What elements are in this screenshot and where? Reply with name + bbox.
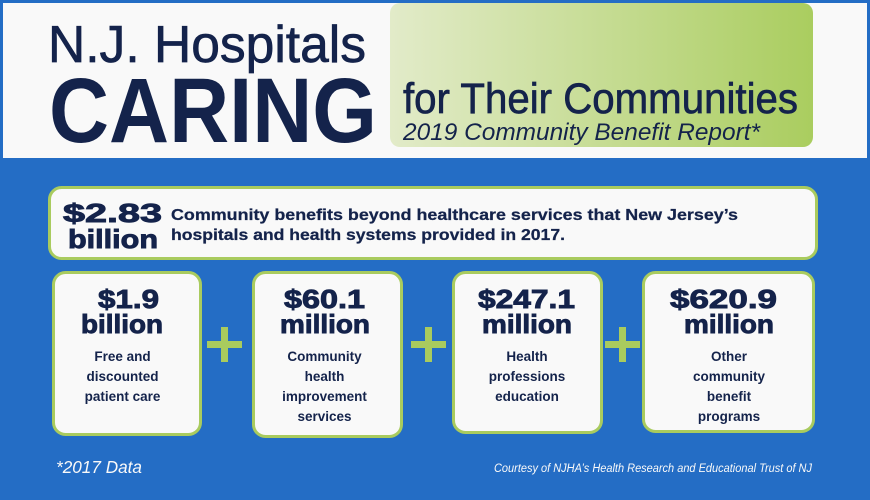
- icon: plus 1: [207, 327, 242, 362]
- total unit: billion: [68, 224, 158, 254]
- card: health professions education: Health: [506, 349, 548, 364]
- total description line 2: hospitals and health systems provided in 2017.: [171, 227, 565, 244]
- card: free and discounted care: billion: [81, 309, 163, 339]
- card: free and discounted care: discounted: [86, 369, 159, 384]
- card: community health improvement: million: [280, 309, 370, 339]
- card: community health improvement: health: [305, 369, 344, 384]
- title: CARING: CARING: [49, 60, 377, 162]
- card: other community benefit programs: $620.9: [670, 284, 777, 314]
- card: other community benefit programs: programs: [698, 409, 760, 424]
- card: community health improvement: [254, 272, 402, 436]
- card: free and discounted care: $1.9: [98, 284, 159, 314]
- card: free and discounted care: Free and: [94, 349, 151, 364]
- card: health professions education: [454, 272, 602, 432]
- total description line 1: Community benefits beyond healthcare services that New Jersey’s: [171, 207, 738, 224]
- credit: Courtesy of NJHA’s Health Research and Educational Trust of NJ: [494, 463, 812, 475]
- card: other community benefit programs: million: [684, 309, 774, 339]
- card: community health improvement: improvement: [282, 389, 367, 404]
- card: community health improvement: Community: [287, 349, 362, 364]
- card: health professions education: education: [495, 389, 559, 404]
- card: health professions education: professions: [489, 369, 565, 384]
- header panel: [3, 3, 867, 162]
- card: free and discounted care: [54, 272, 200, 434]
- card: health professions education: $247.1: [478, 284, 575, 314]
- card: other community benefit programs: benefit: [707, 389, 752, 404]
- card: free and discounted care: patient care: [85, 389, 161, 404]
- card: health professions education: million: [482, 309, 572, 339]
- panel: total community benefits: [50, 188, 816, 258]
- card: other community benefit programs: community: [693, 369, 765, 384]
- subtitle: for Their Communities: for Their Communities: [403, 75, 798, 123]
- total amount: $2.83: [63, 198, 162, 228]
- card: other community benefit programs: Other: [711, 349, 748, 364]
- card: community health improvement: services: [297, 409, 352, 424]
- card: community health improvement: $60.1: [284, 284, 365, 314]
- icon: plus 3: [605, 327, 640, 362]
- card: other community benefit programs: [644, 272, 814, 432]
- icon: plus 2: [411, 327, 446, 362]
- subtitle: report name: 2019 Community Benefit Report*: [402, 119, 761, 146]
- green gradient banner: [390, 3, 813, 147]
- title: N.J. Hospitals: N.J. Hospitals: [48, 16, 366, 74]
- footnote: *2017 Data: [56, 457, 142, 477]
